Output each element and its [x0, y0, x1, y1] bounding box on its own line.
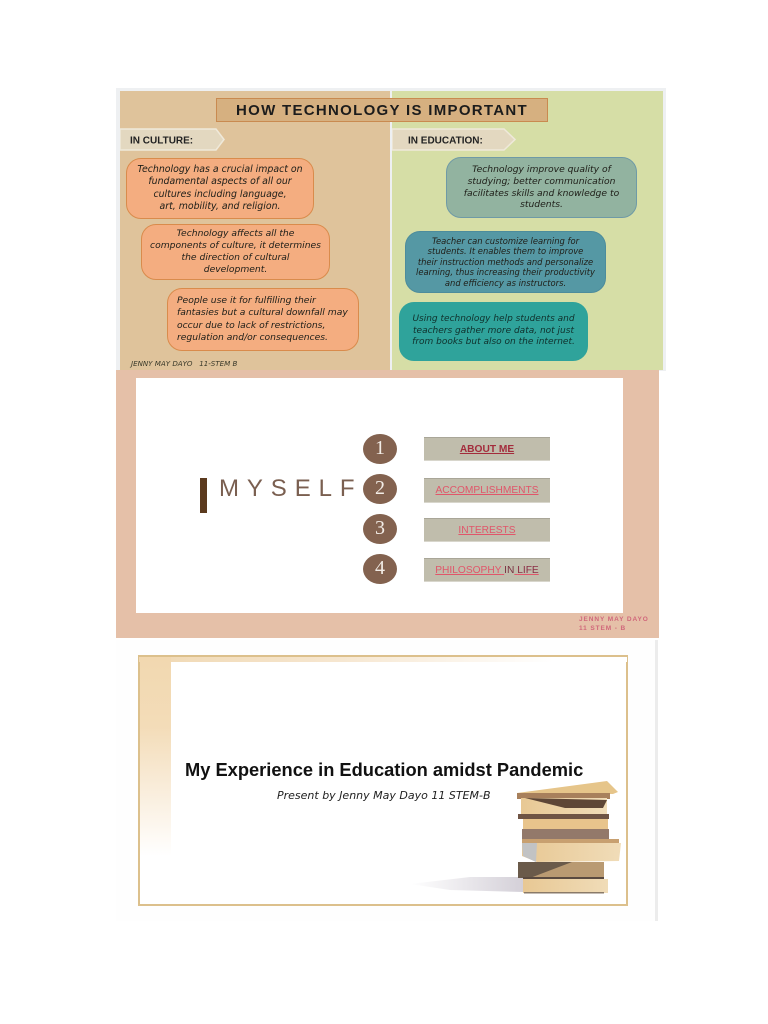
subtitle: Present by Jenny May Dayo 11 STEM-B	[277, 789, 490, 802]
arrow label: in culture	[120, 128, 225, 151]
culture text box 3: regulation and/or consequences.	[177, 332, 328, 343]
number 1: 1	[375, 437, 385, 459]
panel: education amidst pandemic slide	[116, 640, 655, 921]
number 4: 4	[375, 557, 385, 579]
button: interests	[424, 518, 550, 542]
panel: myself	[116, 370, 659, 638]
culture text box 3: fantasies but a cultural downfall may	[177, 307, 348, 318]
culture text box 3: occur due to lack of restrictions,	[177, 320, 325, 330]
number 2: 2	[375, 477, 385, 499]
button: philosophy in life: PHILOSOPHY LIFE	[435, 565, 539, 576]
education text box 1: studying; better communication	[468, 176, 615, 187]
panel: how technology is important	[116, 88, 666, 371]
number 4	[363, 554, 397, 584]
culture text box 1: art, mobility, and religion.	[160, 201, 280, 212]
author credit: JENNY MAY DAYO 11-STEM B	[131, 359, 237, 368]
culture text box 1: Technology has a crucial impact on	[137, 164, 303, 175]
education text box 2: learning, thus increasing their productivity	[416, 267, 595, 277]
education text box 1: Technology improve quality of	[472, 164, 611, 175]
education text box 1: students.	[520, 199, 563, 210]
number 3: 3	[375, 517, 385, 539]
number 3	[363, 514, 397, 544]
white slide area	[136, 378, 623, 613]
education text box 2: and efficiency as instructors.	[445, 278, 566, 288]
education text box 2	[405, 231, 606, 293]
education text box 1	[446, 157, 637, 218]
culture text box 2: Technology affects all the	[177, 228, 294, 239]
education text box 2: Teacher can customize learning for	[432, 236, 579, 246]
culture text box 2: the direction of cultural	[182, 252, 289, 263]
button: about me	[424, 437, 550, 461]
heading: myself: MYSELF	[219, 475, 362, 502]
button: about me: ABOUT ME	[460, 444, 514, 455]
title: HOW TECHNOLOGY IS IMPORTANT	[236, 102, 528, 119]
title	[216, 98, 548, 122]
slide frame	[138, 655, 628, 906]
culture text box 1	[126, 158, 314, 219]
credit	[579, 616, 649, 632]
education text box 3: teachers gather more data, not just	[413, 326, 574, 336]
button: accomplishments	[424, 478, 550, 503]
education text box 2: their instruction methods and personalize	[418, 257, 593, 267]
arrow label: in culture: IN CULTURE:	[130, 136, 193, 146]
icon: stack of books	[430, 781, 621, 894]
education text box 3: Using technology help students and	[412, 314, 575, 324]
arrow label: in education: IN EDUCATION:	[408, 136, 483, 146]
button: interests: INTERESTS	[458, 525, 516, 536]
left gradient band	[140, 657, 171, 856]
credit: 11 STEM - B	[579, 625, 626, 632]
number 2	[363, 474, 397, 504]
education text box 3	[399, 302, 588, 361]
culture text box 2: development.	[204, 264, 267, 275]
culture text box 2: components of culture, it determines	[150, 240, 321, 251]
button: accomplishments: ACCOMPLISHMENTS	[435, 485, 539, 496]
accent bar	[200, 478, 207, 513]
culture text box 3	[167, 288, 359, 351]
button: philosophy in life: IN	[504, 565, 514, 576]
panel: education background	[392, 91, 663, 370]
arrow label: in education	[392, 128, 516, 151]
number 1	[363, 434, 397, 464]
education text box 3: from books but also on the internet.	[412, 337, 575, 347]
panel: culture background	[120, 91, 390, 370]
top gradient band	[139, 657, 627, 662]
title: My Experience in Education amidst Pandemic	[185, 759, 583, 780]
culture text box 3: People use it for fulfilling their	[177, 295, 316, 306]
education text box 2: students. It enables them to improve	[428, 246, 583, 256]
culture text box 2	[141, 224, 330, 280]
right edge strip	[655, 640, 658, 921]
culture text box 1: fundamental aspects of all our	[148, 176, 292, 187]
credit: JENNY MAY DAYO	[579, 616, 649, 623]
education text box 1: facilitates skills and knowledge to	[464, 188, 619, 198]
culture text box 1: cultures including language,	[153, 188, 287, 200]
button: philosophy in life	[424, 558, 550, 582]
